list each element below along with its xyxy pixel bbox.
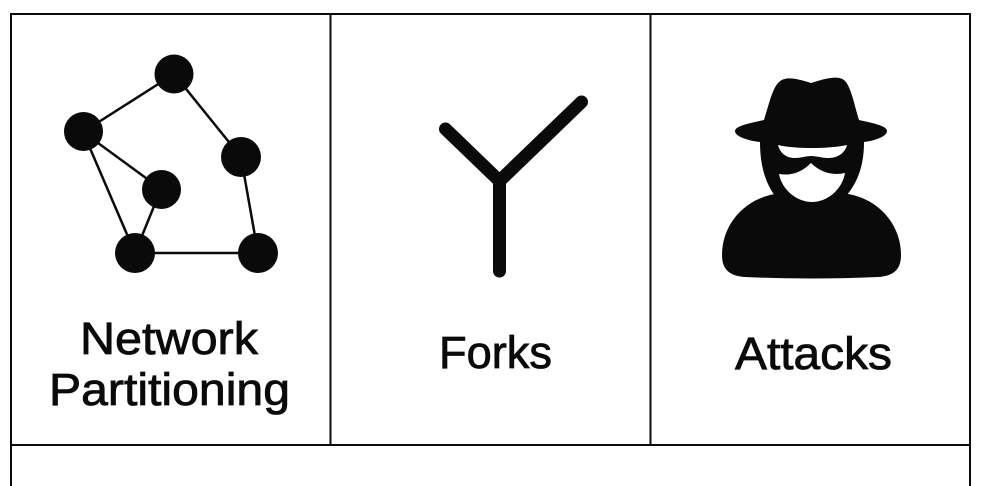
heading: Network Partitioning: Partitioning <box>49 364 290 415</box>
panel: forks <box>439 102 582 378</box>
heading: Network Partitioning <box>49 313 290 415</box>
eye slit <box>778 145 847 158</box>
panel: attacks <box>722 78 901 379</box>
icon: network graph <box>64 54 278 273</box>
heading: Network Partitioning: Network <box>80 313 259 364</box>
panel: network partitioning <box>49 54 290 415</box>
hat and face mask <box>735 78 887 196</box>
icon: fork <box>446 102 582 271</box>
body <box>722 194 901 278</box>
heading: Attacks: Attacks <box>735 328 892 379</box>
icon: spy <box>722 78 901 279</box>
heading: Forks: Forks <box>439 327 552 378</box>
face opening <box>779 163 845 202</box>
